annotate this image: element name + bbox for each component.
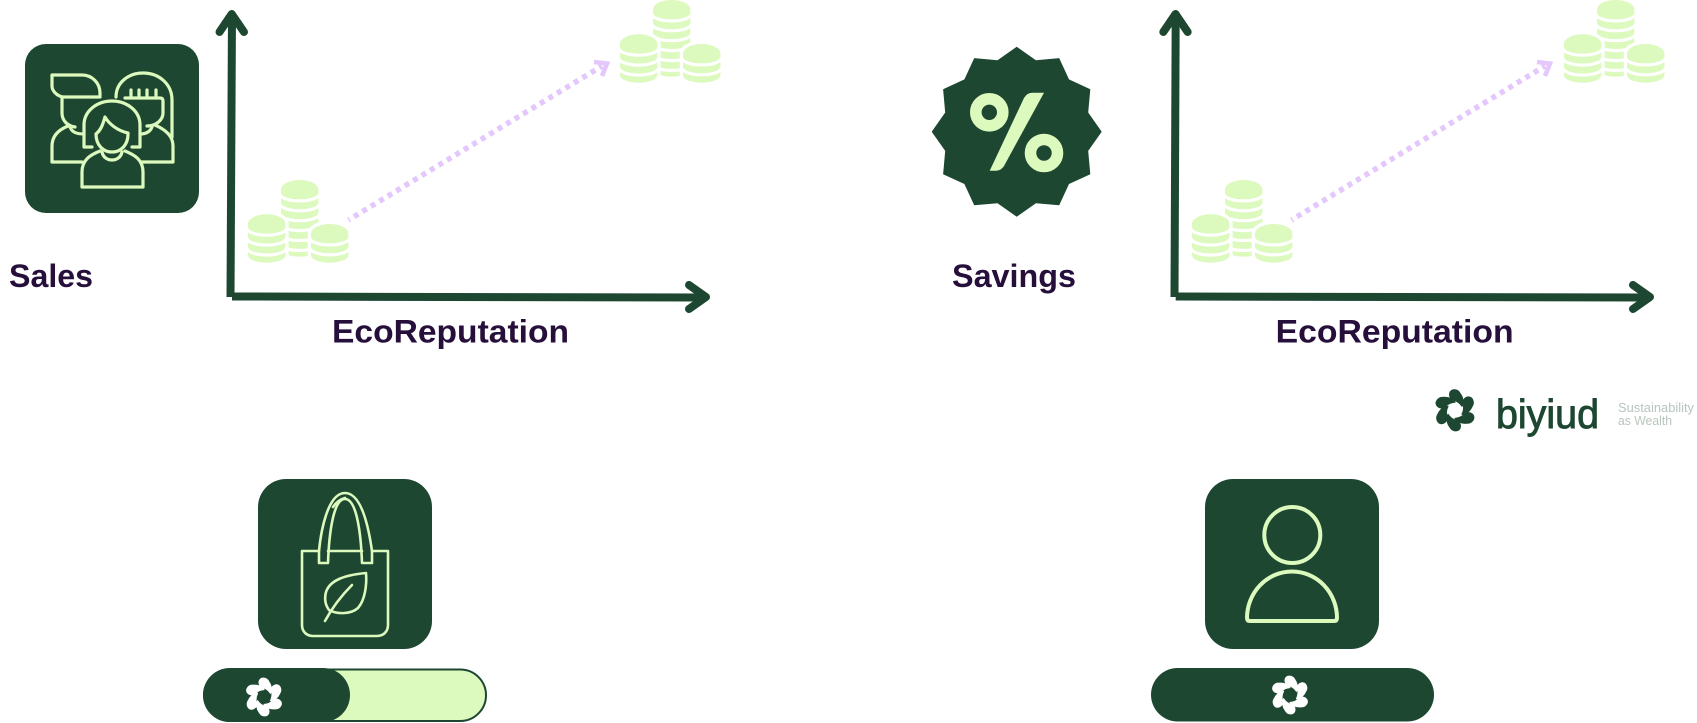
dotted trend arrow [1292, 62, 1550, 220]
coins low [1191, 180, 1293, 263]
chart: savings versus ecoreputation [1163, 0, 1665, 350]
coins low [247, 180, 349, 263]
coins high [1563, 0, 1665, 83]
heading: sales: Sales [9, 258, 93, 294]
logo mark [1433, 390, 1477, 431]
y axis arrow [220, 14, 244, 297]
icon: person [1247, 507, 1337, 621]
tagline: as Wealth [1618, 413, 1672, 428]
tagline: Sustainability [1618, 400, 1695, 415]
axis label: EcoReputation [1276, 314, 1514, 350]
icon: shopping bag with leaf [302, 493, 388, 636]
x axis arrow [232, 285, 706, 309]
progress bar: full [1151, 668, 1434, 722]
panel: person icon [1205, 479, 1379, 649]
heading: savings: Savings [952, 258, 1076, 294]
panel: sales icon [25, 44, 199, 213]
tagline [1618, 400, 1695, 428]
logo mark on bar [244, 678, 284, 716]
logo mark on bar [1270, 676, 1310, 714]
icon: percent badge [932, 47, 1102, 217]
coins high [619, 0, 721, 83]
y axis arrow [1163, 14, 1188, 297]
chart: sales versus ecoreputation [220, 0, 721, 350]
progress bar: partially filled [203, 668, 486, 722]
wordmark: biyiud [1496, 391, 1599, 437]
icon: group of people [52, 73, 173, 187]
dotted trend arrow [348, 62, 607, 220]
panel: eco bag icon [258, 479, 432, 649]
logo: biyiud [1433, 390, 1695, 437]
x axis arrow [1176, 285, 1650, 309]
axis label: EcoReputation [332, 314, 569, 350]
